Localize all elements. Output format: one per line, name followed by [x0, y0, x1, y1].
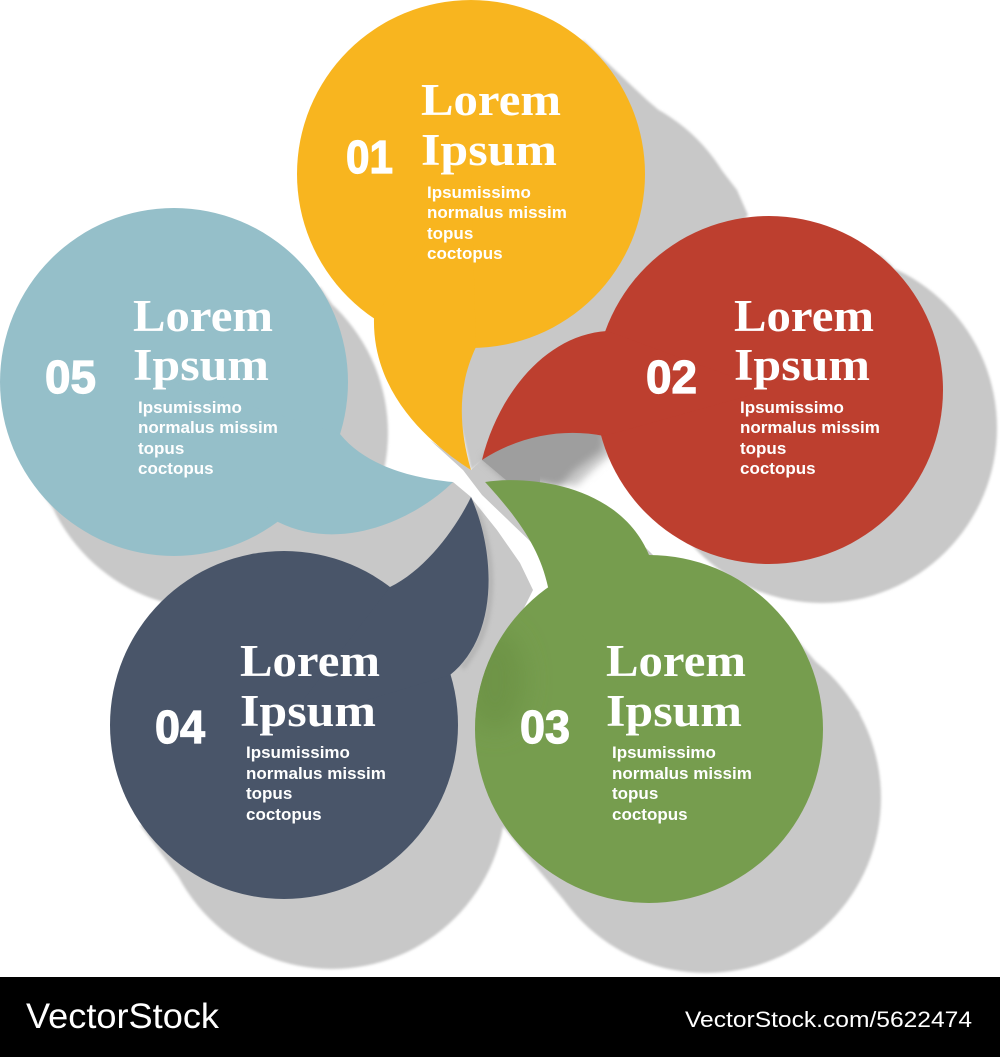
text 03: Ipsumissimo [612, 743, 716, 762]
text 02 [740, 398, 880, 478]
heading 05 [133, 291, 273, 390]
text 05: coctopus [138, 459, 214, 478]
text 02: coctopus [740, 459, 816, 478]
number 02: 02 [646, 351, 697, 403]
logo text: VectorStock [26, 997, 220, 1036]
image id: VectorStock.com/5622474 [685, 1007, 972, 1032]
heading 05: Ipsum [133, 340, 269, 390]
text 05 [138, 398, 278, 478]
heading 04: Lorem [240, 636, 380, 686]
watermark bar [0, 977, 1000, 1057]
heading 03: Ipsum [606, 686, 742, 736]
text 01 [427, 183, 567, 263]
text 01: topus [427, 224, 473, 243]
text 03: coctopus [612, 805, 688, 824]
heading 01: Ipsum [421, 125, 557, 175]
text 02: topus [740, 439, 786, 458]
bubble 03 green [465, 480, 823, 903]
text 04: topus [246, 784, 292, 803]
bubble 05 light blue [0, 208, 453, 556]
text 01: Ipsumissimo [427, 183, 531, 202]
number 05: 05 [45, 351, 96, 403]
heading 03 [606, 636, 746, 736]
text 03: topus [612, 784, 658, 803]
text 04 [246, 743, 386, 824]
heading 03: Lorem [606, 636, 746, 686]
number 03: 03 [520, 701, 570, 753]
heading 04: Ipsum [240, 686, 376, 736]
bubble 01 yellow [297, 0, 645, 470]
text 03: normalus missim [612, 764, 752, 783]
heading 04 [240, 636, 380, 736]
number 01: 01 [346, 131, 393, 183]
text 05: normalus missim [138, 418, 278, 437]
number 04: 04 [155, 701, 205, 753]
heading 02: Lorem [734, 291, 874, 341]
text 05: topus [138, 439, 184, 458]
text 04: Ipsumissimo [246, 743, 350, 762]
bubble 02 red [482, 216, 943, 564]
text 05: Ipsumissimo [138, 398, 242, 417]
text 01: normalus missim [427, 203, 567, 222]
text 04: normalus missim [246, 764, 386, 783]
text 03 [612, 743, 752, 824]
text 02: Ipsumissimo [740, 398, 844, 417]
bubble 04 navy [110, 497, 489, 899]
heading 05: Lorem [133, 291, 273, 341]
heading 02 [734, 291, 874, 390]
heading 01: Lorem [421, 75, 561, 125]
text 02: normalus missim [740, 418, 880, 437]
text 04: coctopus [246, 805, 322, 824]
heading 02: Ipsum [734, 340, 870, 390]
heading 01 [421, 75, 561, 175]
text 01: coctopus [427, 244, 503, 263]
